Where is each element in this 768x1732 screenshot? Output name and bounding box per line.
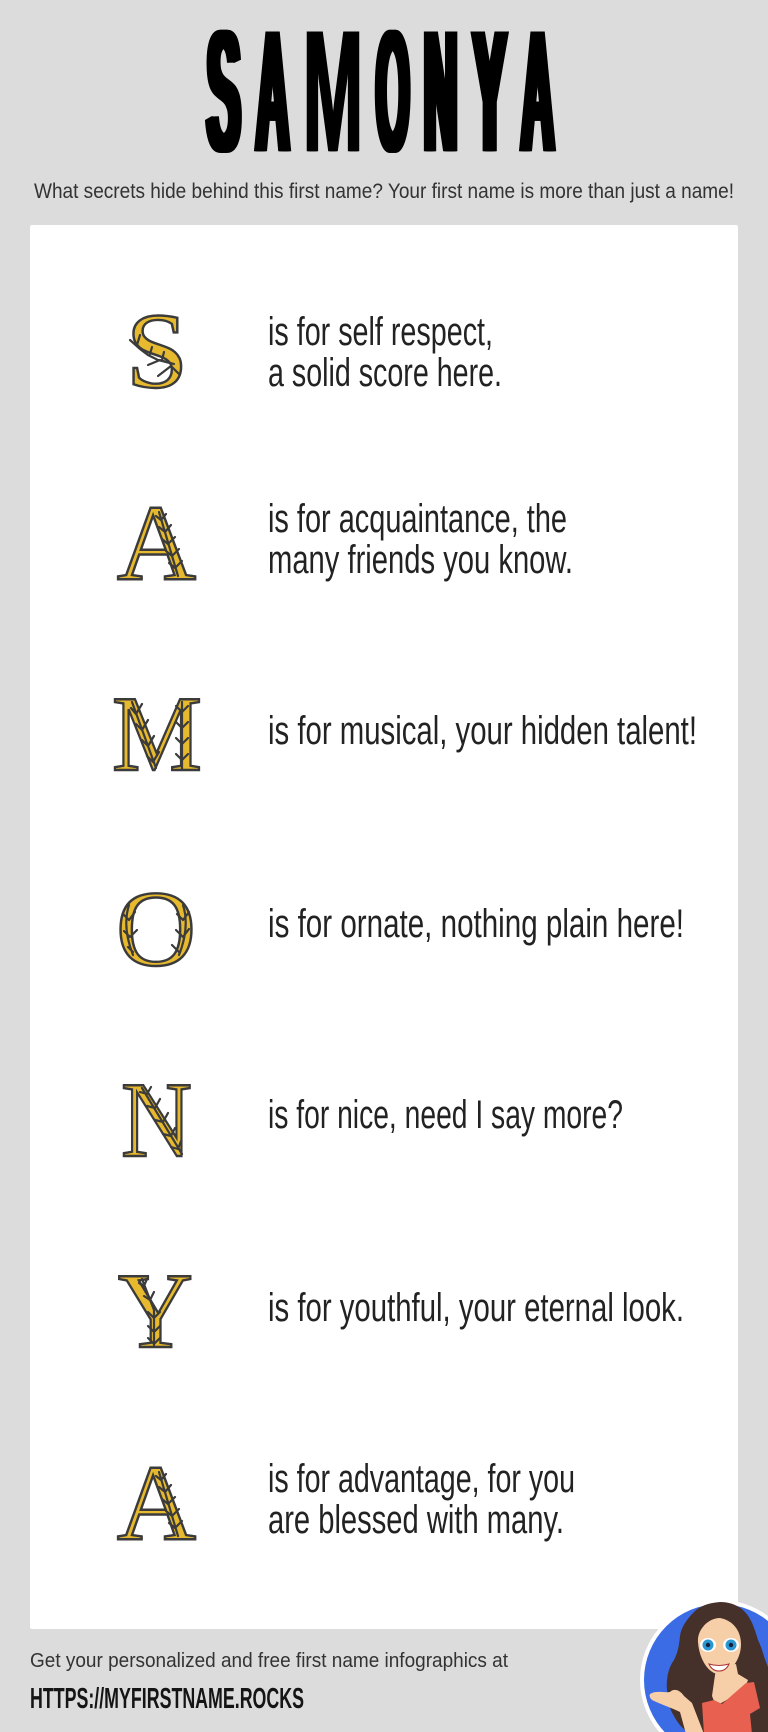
- row: Y: [118, 1252, 684, 1371]
- text: N: is for nice, need I say more?: [268, 1093, 623, 1137]
- row: N: [121, 1061, 623, 1180]
- text: A second: are blessed with many.: [268, 1498, 564, 1542]
- icon: avatar: [640, 1600, 768, 1732]
- text: A: is for acquaintance, the: [268, 497, 567, 541]
- text: S: is for self respect,: [268, 310, 493, 354]
- title: Y: [473, 0, 506, 189]
- row: A: [117, 484, 573, 603]
- text: S: a solid score here.: [268, 351, 502, 395]
- footer text: Get your personalized and free first name infographics at: [30, 1650, 508, 1672]
- text: A: many friends you know.: [268, 538, 573, 582]
- title: A: [521, 0, 554, 189]
- title: O: [376, 0, 409, 189]
- row: O: [116, 870, 684, 989]
- icon: letter A: A: [117, 484, 196, 603]
- icon: letter S: S: [126, 292, 188, 411]
- icon: letter Y: Y: [118, 1252, 193, 1371]
- title: S: [207, 0, 240, 189]
- icon: letter O: O: [116, 870, 196, 989]
- icon: letter A second: A: [117, 1444, 196, 1563]
- text: A second: is for advantage, for you: [268, 1457, 575, 1501]
- title: [204, 0, 556, 189]
- avatar hair: [667, 1602, 768, 1732]
- text: S: [268, 310, 502, 395]
- title: M: [303, 0, 363, 189]
- panel: name letters: [30, 225, 738, 1629]
- icon: letter M: M: [112, 675, 202, 794]
- title: A: [256, 0, 289, 189]
- row: M: [112, 675, 697, 794]
- row: S: [126, 292, 502, 411]
- avatar face: [698, 1618, 741, 1674]
- icon: letter N: N: [121, 1061, 192, 1180]
- row: A second: [117, 1444, 575, 1563]
- footer url: HTTPS://MYFIRSTNAME.ROCKS: [30, 1683, 304, 1715]
- title: N: [424, 0, 457, 189]
- text: A: [268, 497, 573, 582]
- avatar shirt: [702, 1682, 760, 1732]
- avatar arm and hand: [650, 1690, 704, 1732]
- text: A second: [268, 1457, 575, 1542]
- avatar neck: [712, 1664, 748, 1706]
